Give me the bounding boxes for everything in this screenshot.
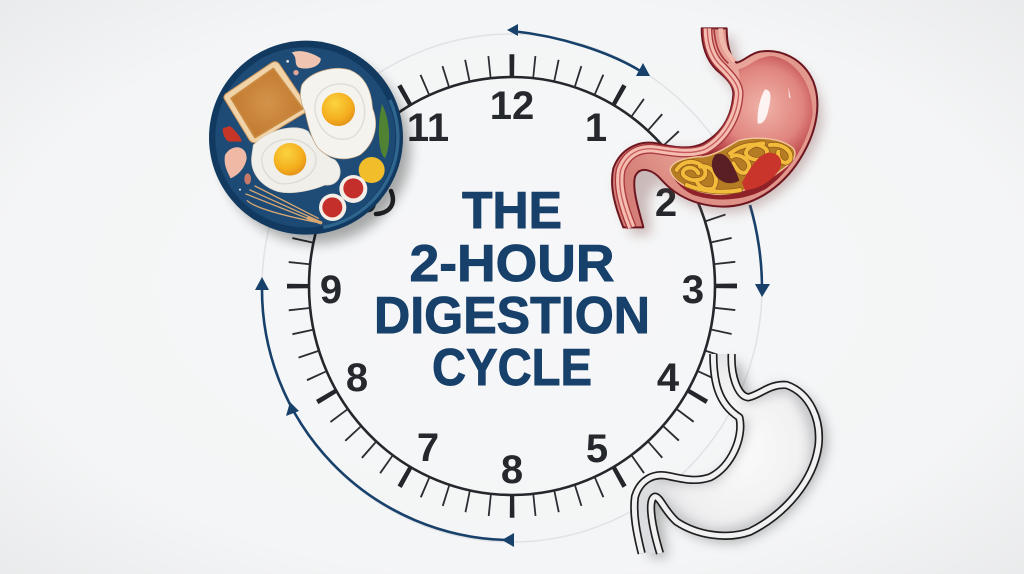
plate of eggs and toast xyxy=(209,41,410,244)
stomach body xyxy=(612,28,817,227)
stomach inner wall xyxy=(670,56,813,200)
clock numerals: 8 xyxy=(346,356,368,400)
red garnish xyxy=(223,126,242,142)
title: THE xyxy=(462,182,562,240)
clock numerals: 11 xyxy=(407,106,449,150)
highlights xyxy=(757,87,791,124)
clock numerals: 12 xyxy=(490,84,534,128)
arrow: top arc xyxy=(507,24,650,76)
arrows around the clock xyxy=(255,24,770,547)
faint outer ring xyxy=(262,34,762,542)
ham slice left xyxy=(225,147,247,178)
plate well xyxy=(215,47,395,227)
small dots xyxy=(239,60,299,191)
empty stomach shadow xyxy=(641,361,827,557)
esophagus and duodenum stripes xyxy=(620,28,739,227)
sauce cup one xyxy=(339,175,367,203)
lower fried egg xyxy=(252,128,340,193)
clock numerals: 5 xyxy=(586,427,608,471)
clock numerals: 1 xyxy=(585,106,607,150)
clock numerals: 3 xyxy=(682,268,704,312)
title: CYCLE xyxy=(432,339,592,397)
remnant of numeral 0 behind plate xyxy=(376,191,393,214)
empty white stomach xyxy=(634,354,827,557)
toast xyxy=(224,62,308,143)
clock numerals: 2 xyxy=(655,181,677,225)
clock numerals xyxy=(320,84,704,492)
stomach shadow xyxy=(617,38,822,235)
title: 2-HOUR xyxy=(410,235,614,293)
title: DIGESTION xyxy=(374,287,650,345)
plate rim highlight xyxy=(323,100,398,227)
clock face xyxy=(298,66,726,506)
noodles xyxy=(677,143,791,192)
green leaf xyxy=(379,104,389,158)
sauce cup two xyxy=(319,194,346,221)
arrow: left arc xyxy=(255,277,514,547)
clock numerals: 4 xyxy=(657,356,680,400)
clock numerals: 7 xyxy=(417,426,439,470)
empty stomach inner shading xyxy=(653,386,817,537)
liver piece xyxy=(712,154,739,183)
plate shadow xyxy=(220,54,410,244)
arrow: right arc xyxy=(750,205,770,297)
clock numerals: 10 xyxy=(334,177,378,221)
hour ticks xyxy=(298,66,726,506)
plate rim xyxy=(209,41,403,235)
clock numerals: 8 xyxy=(501,448,523,492)
clock circle xyxy=(309,77,715,495)
upper fried egg xyxy=(300,68,376,159)
full red stomach xyxy=(612,28,822,235)
empty stomach outlines xyxy=(634,354,819,553)
fork xyxy=(246,186,321,223)
clock numerals: 9 xyxy=(320,268,342,312)
minor ticks xyxy=(298,66,726,506)
ham slice top xyxy=(292,51,321,69)
empty stomach fill xyxy=(637,354,817,553)
title xyxy=(374,182,650,397)
food window xyxy=(670,138,795,195)
red sausage xyxy=(742,153,781,190)
yellow garnish xyxy=(359,157,385,183)
